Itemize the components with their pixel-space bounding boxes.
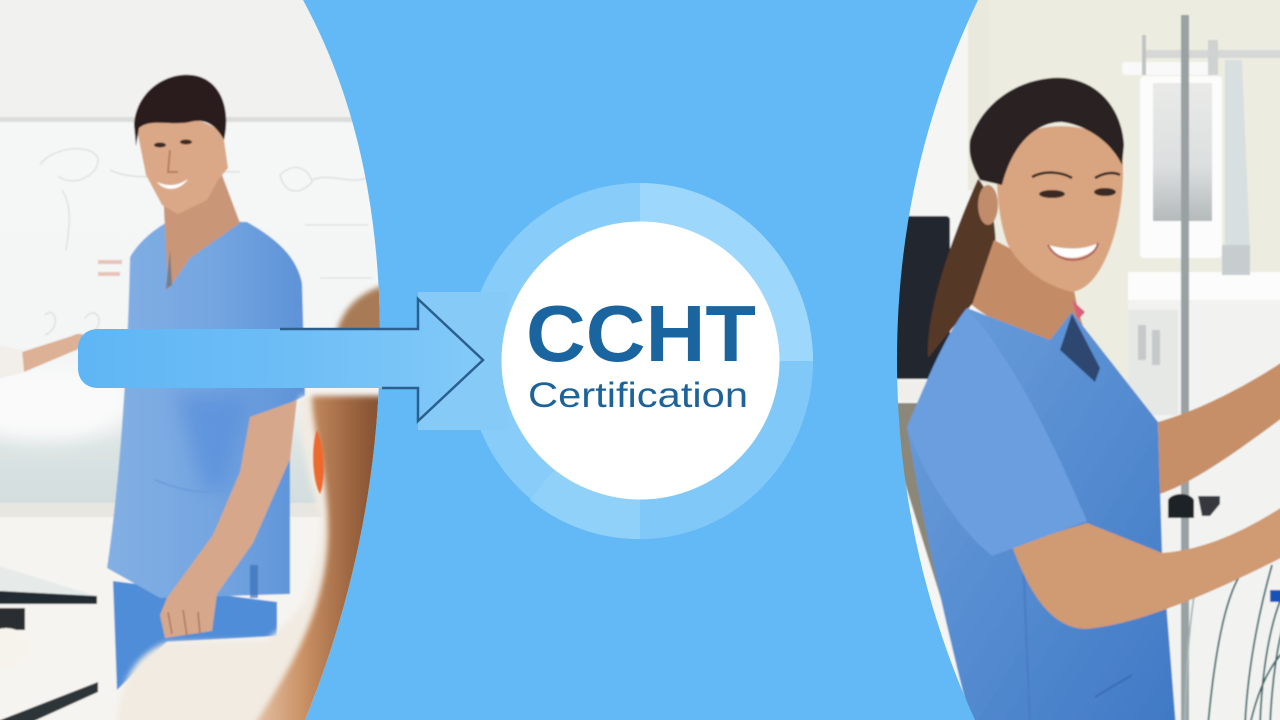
scrubs torso (907, 308, 1177, 720)
mouth (157, 179, 188, 189)
lower arm (1012, 495, 1280, 629)
whiteboard (0, 120, 400, 505)
ponytail (928, 179, 996, 358)
blurred foreground shoulder (115, 396, 395, 720)
IV crossbar (1122, 62, 1212, 75)
badge subtitle: Certification (528, 376, 748, 415)
neck (971, 240, 1084, 340)
clamp (1168, 494, 1194, 518)
shirt shadow fold (178, 395, 250, 490)
whiteboard scribbles (40, 149, 372, 335)
ring top-right highlight (640, 183, 813, 361)
arrow connector tab (418, 292, 508, 430)
machine body (1128, 290, 1280, 720)
dark cabinet (897, 215, 952, 380)
badge title: CCHT (526, 289, 756, 378)
photo: technician at whiteboard (0, 0, 400, 720)
wall (0, 0, 351, 118)
IV stand (1225, 60, 1250, 250)
trousers (113, 581, 277, 690)
orange blurred patch (313, 430, 324, 494)
ring bottom-left highlight (530, 361, 640, 539)
badge inner disc (502, 222, 780, 500)
v-neck (1060, 314, 1100, 382)
forearm and hand (160, 400, 297, 638)
wires (1185, 565, 1280, 720)
arrow pointing to badge (78, 299, 483, 421)
ring bottom-right shade (640, 361, 813, 539)
arrow body (78, 299, 483, 421)
head (997, 126, 1123, 292)
arrow head outline (280, 299, 483, 421)
photo: technician at dialysis machine (880, 0, 1280, 720)
pocket slit (250, 565, 258, 598)
upper arm (1158, 350, 1280, 494)
floor and counter (0, 516, 364, 720)
blurred arm above arrow (334, 282, 380, 328)
smile (1048, 243, 1098, 258)
table top (0, 566, 93, 596)
hair (969, 78, 1124, 185)
shirt (107, 220, 305, 598)
eyes (1039, 190, 1065, 198)
sleeve (907, 308, 1087, 556)
hair (134, 75, 226, 146)
certification badge (418, 183, 813, 539)
pointing arm (22, 334, 88, 372)
IV pole (1181, 15, 1189, 720)
wall (897, 20, 987, 700)
head (137, 118, 228, 214)
neck (163, 175, 240, 290)
IV bag (1140, 76, 1222, 258)
badge outer ring (467, 183, 813, 539)
blurred foreground arm (254, 391, 378, 720)
